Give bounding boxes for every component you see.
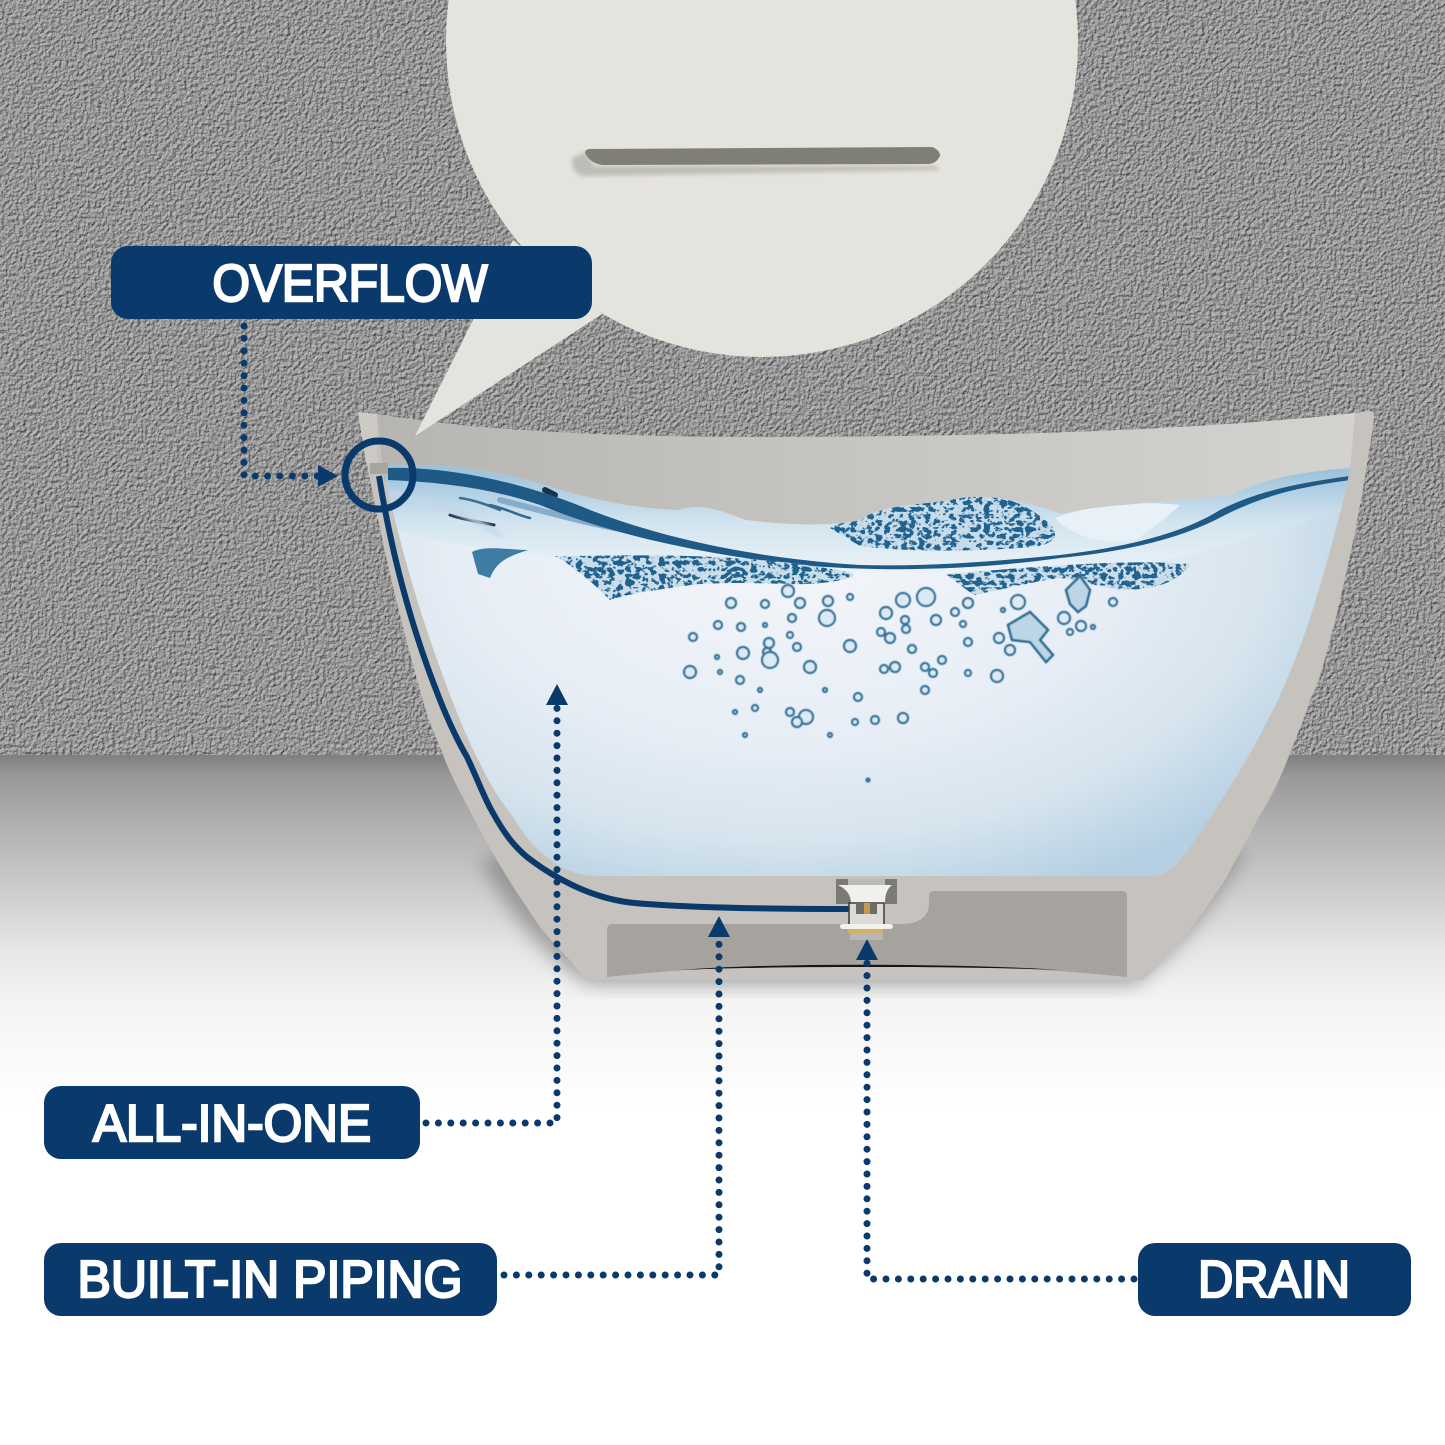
foam band left — [555, 555, 853, 600]
label: overflow — [111, 246, 592, 319]
drain washer — [840, 924, 893, 929]
leader: built-in piping — [504, 916, 730, 1275]
label: drain: DRAIN — [1198, 1251, 1350, 1309]
leader: overflow — [244, 326, 338, 487]
water surface band — [384, 460, 1352, 573]
water body — [384, 460, 1354, 880]
wall background — [0, 0, 1445, 756]
bathtub cross-section — [358, 411, 1374, 980]
bubble shape — [415, 0, 1078, 436]
left surface streaks — [390, 490, 625, 535]
dark waterline — [388, 468, 1350, 569]
leader: drain — [856, 939, 1134, 1279]
tub floor shadow — [480, 850, 1245, 985]
built-in pipe — [379, 476, 850, 909]
left splash — [472, 548, 528, 578]
foam crest — [830, 495, 1055, 550]
large bubble clusters — [1008, 576, 1090, 662]
overflow slot — [572, 147, 940, 176]
foam band right — [945, 562, 1190, 595]
label: all-in-one: ALL-IN-ONE — [93, 1095, 371, 1153]
floor — [0, 755, 1445, 1445]
callout bubble: overflow close-up — [415, 0, 1078, 436]
drain window — [856, 903, 877, 914]
drain body — [849, 903, 884, 925]
drain housing — [836, 879, 897, 904]
left rim light — [358, 412, 377, 463]
tub shell — [358, 411, 1374, 980]
label: built-in piping: BUILT-IN PIPING — [78, 1251, 462, 1309]
slot shadow — [572, 152, 938, 176]
label: all-in-one — [44, 1086, 420, 1159]
overflow ring marker — [345, 441, 413, 509]
water fill — [384, 460, 1354, 880]
white crest right — [1055, 503, 1180, 541]
bubbles — [684, 585, 1117, 782]
overflow port — [370, 463, 388, 474]
label: drain — [1138, 1243, 1411, 1316]
cavity shadow line — [680, 965, 1060, 970]
back wall — [377, 413, 1355, 540]
label: overflow: OVERFLOW — [212, 255, 488, 313]
drain cap — [838, 885, 892, 904]
leader: all-in-one — [426, 684, 568, 1123]
recess cavity — [607, 891, 1127, 977]
drain fitting — [836, 879, 897, 940]
